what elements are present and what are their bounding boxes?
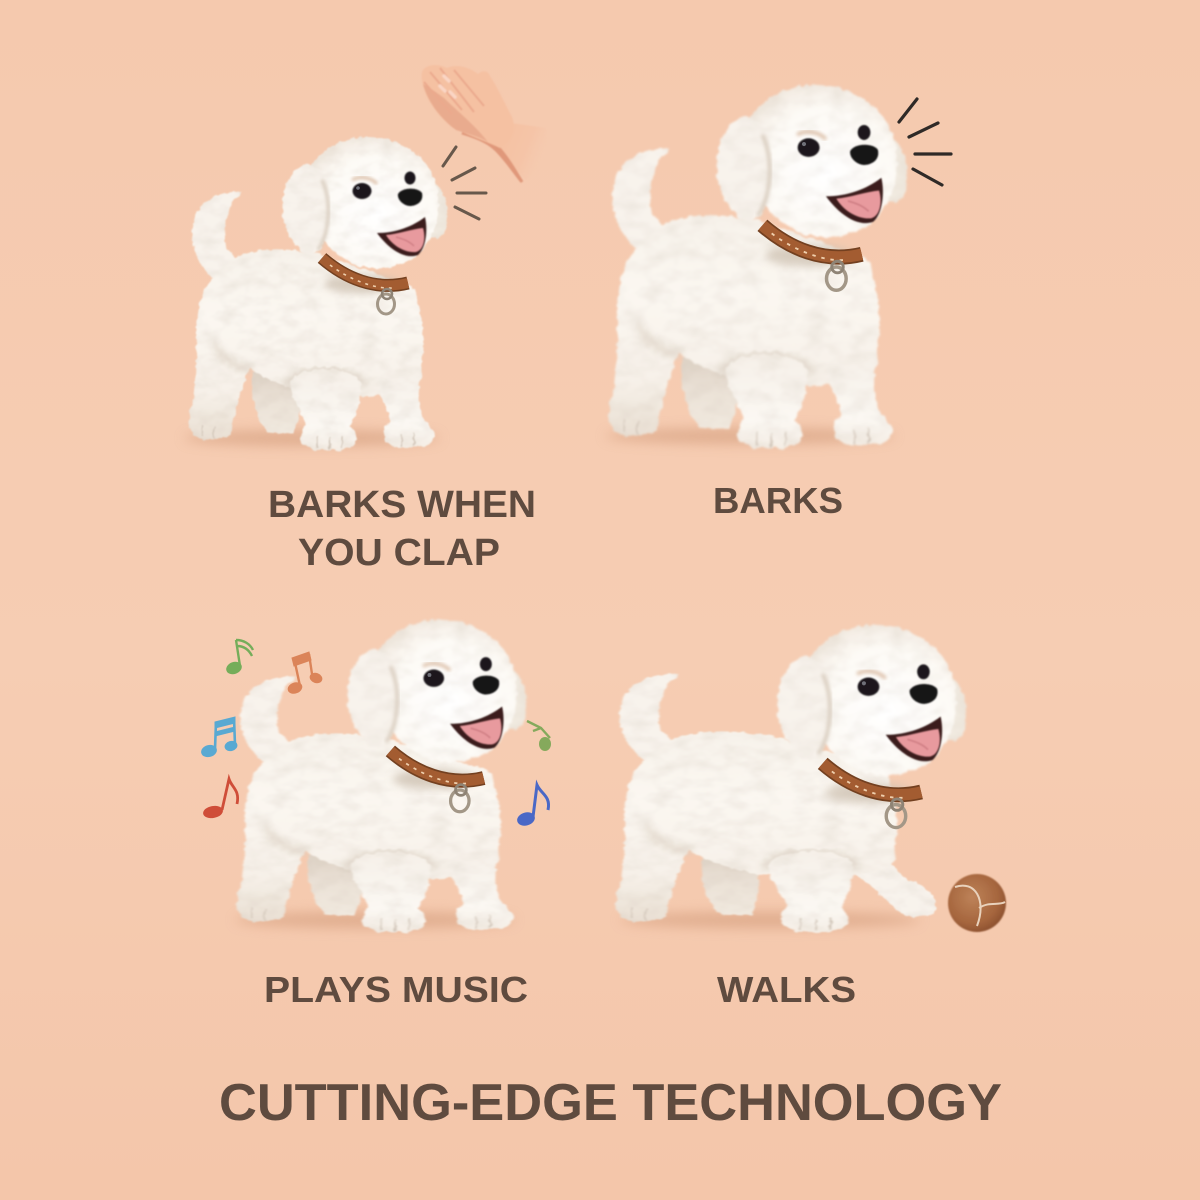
label: barks when you clap: YOU CLAP bbox=[298, 532, 500, 574]
dog: walks bbox=[616, 625, 967, 932]
dog: plays music bbox=[235, 620, 527, 932]
label: barks when you clap bbox=[268, 484, 536, 574]
label: barks: BARKS bbox=[713, 480, 843, 521]
label: plays music: PLAYS MUSIC bbox=[264, 969, 528, 1010]
dog: barks when you clap bbox=[184, 137, 448, 450]
icon: clapping hand bbox=[422, 65, 548, 182]
label: walks: WALKS bbox=[717, 969, 856, 1010]
icon: sound lines for clap bbox=[443, 147, 486, 219]
icon: music notes bbox=[200, 640, 551, 828]
dog: barks bbox=[605, 85, 908, 448]
icon: sound lines for bark bbox=[899, 99, 951, 185]
title: CUTTING-EDGE TECHNOLOGY bbox=[219, 1074, 1002, 1132]
icon: ball bbox=[948, 874, 1006, 932]
label: barks when you clap: BARKS WHEN bbox=[268, 484, 536, 526]
